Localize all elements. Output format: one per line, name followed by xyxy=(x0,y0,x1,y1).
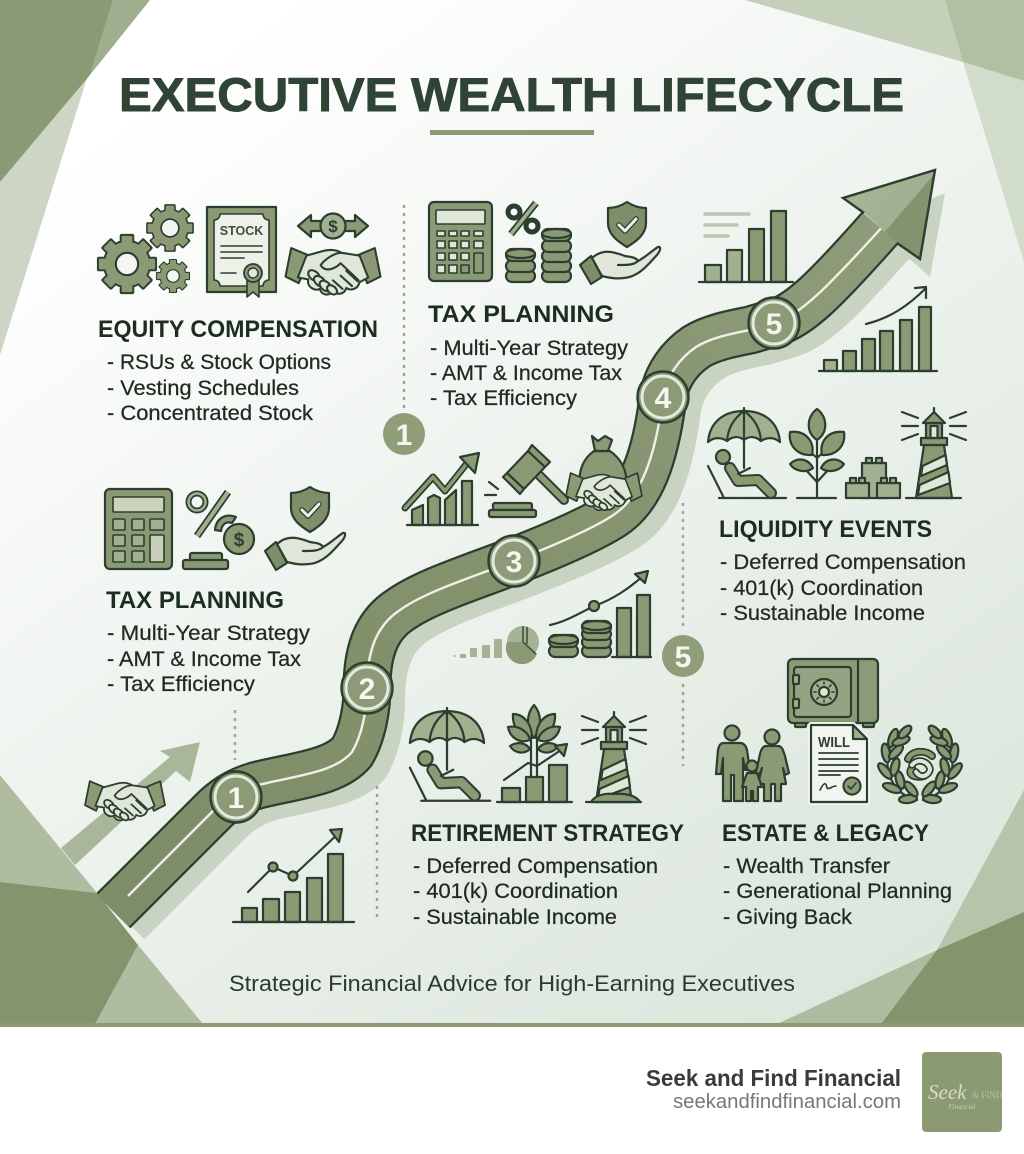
bottom-left corner shapes xyxy=(0,775,203,1024)
heading: RETIREMENT STRATEGY xyxy=(411,820,684,847)
panel: tax planning top xyxy=(428,202,660,410)
icon: plant xyxy=(790,409,844,498)
road badge 4 xyxy=(638,372,688,422)
list: - AMT & Income Tax xyxy=(107,648,302,671)
road body xyxy=(113,228,880,911)
icon: stock certificate: STOCK xyxy=(220,224,263,238)
panel: retirement strategy xyxy=(410,705,684,929)
road badge 4: 4 xyxy=(655,382,672,415)
list xyxy=(430,337,629,410)
list: - Concentrated Stock xyxy=(107,402,314,425)
heading: ESTATE & LEGACY xyxy=(722,820,929,847)
icon: will document xyxy=(811,725,867,802)
icon: bar chart top xyxy=(699,211,793,282)
heading: TAX PLANNING xyxy=(428,301,614,328)
footer logo xyxy=(922,1052,1003,1132)
growth road arrow xyxy=(113,170,945,923)
road badge 3: 3 xyxy=(506,546,522,579)
icon: calculator xyxy=(105,489,172,569)
icon: shield in hand xyxy=(265,487,345,570)
list: - Deferred Compensation xyxy=(413,855,658,878)
icon: safe xyxy=(788,659,878,727)
footer logo: Seek xyxy=(928,1080,967,1104)
icon: growth bar chart lower left xyxy=(233,829,354,922)
list xyxy=(413,855,658,929)
list: - RSUs & Stock Options xyxy=(107,351,331,374)
list: - Multi-Year Strategy xyxy=(430,337,629,360)
icon: will document: WILL xyxy=(818,735,850,751)
plain badge 1 xyxy=(383,413,425,455)
plain badge 1: 1 xyxy=(396,419,412,452)
icon: percent coin and gavel block xyxy=(183,492,254,569)
icon: stock certificate xyxy=(207,207,276,297)
icon: calculator xyxy=(429,202,492,281)
icon: percent coin and gavel block: $ xyxy=(234,530,245,551)
road badge 5 xyxy=(748,298,800,348)
list: - Multi-Year Strategy xyxy=(107,622,311,645)
road badge 2: 2 xyxy=(359,673,375,706)
footer url: seekandfindfinancial.com xyxy=(673,1091,901,1113)
road fill xyxy=(113,228,880,911)
bottom strip xyxy=(0,1023,1024,1027)
heading: LIQUIDITY EVENTS xyxy=(719,516,932,543)
list: - Deferred Compensation xyxy=(720,551,966,574)
icon: shield in hand xyxy=(580,202,660,284)
road badge 2 xyxy=(342,662,392,714)
road shadow xyxy=(128,193,945,923)
icon: mini bars and pie xyxy=(453,626,539,664)
title underline xyxy=(430,130,594,135)
list: - 401(k) Coordination xyxy=(413,880,618,903)
road badge 1: 1 xyxy=(228,782,244,815)
title: EXECUTIVE WEALTH LIFECYCLE xyxy=(119,68,904,121)
icon: percent and coins xyxy=(506,203,571,282)
list: - Tax Efficiency xyxy=(430,387,578,410)
footer logo: Financial xyxy=(947,1103,976,1111)
icon: money bag with handshake xyxy=(566,436,642,512)
list: - Sustainable Income xyxy=(720,602,925,625)
list: - Sustainable Income xyxy=(413,906,617,929)
icon: lighthouse xyxy=(902,408,966,498)
footer logo: & FIND xyxy=(972,1090,1003,1100)
arrow head outline xyxy=(843,170,935,259)
footer brand name: Seek and Find Financial xyxy=(646,1065,901,1091)
bottom-right corner shapes xyxy=(777,790,1024,1024)
icon: umbrella lounger xyxy=(708,408,786,498)
list xyxy=(107,622,311,696)
icon: coins and bars with trend xyxy=(549,571,651,657)
panel: liquidity events xyxy=(708,408,966,625)
icon: gears xyxy=(97,204,194,294)
dotted connector lines xyxy=(235,205,683,922)
heading: TAX PLANNING xyxy=(106,587,284,614)
arrow head xyxy=(843,170,935,259)
list: - Generational Planning xyxy=(723,880,952,903)
list xyxy=(720,551,966,625)
list: - Giving Back xyxy=(723,906,853,929)
list xyxy=(723,855,952,929)
top-right corner shapes xyxy=(745,0,1024,262)
panel: equity compensation xyxy=(97,204,381,425)
small arrow behind handshake xyxy=(61,742,200,865)
road badge 5: 5 xyxy=(766,308,782,341)
road center line xyxy=(128,225,884,896)
list xyxy=(107,351,331,425)
list: - Vesting Schedules xyxy=(107,377,299,400)
icon: handshake with dollar arrows xyxy=(286,214,380,296)
icon: rising bars with curved arrow xyxy=(819,287,937,371)
icon: handshake with dollar arrows: $ xyxy=(328,217,338,236)
icon: blocks xyxy=(846,458,900,498)
plain badge 5 xyxy=(662,635,704,677)
icon: family xyxy=(716,726,789,801)
icon: growth chart with zigzag arrow xyxy=(405,453,479,525)
list: - Wealth Transfer xyxy=(723,855,890,878)
icon: lighthouse on hill xyxy=(582,712,646,802)
top-left corner shapes xyxy=(0,0,150,355)
heading: EQUITY COMPENSATION xyxy=(98,316,378,343)
road badge 3 xyxy=(488,536,540,586)
panel: estate and legacy xyxy=(716,659,964,929)
icon: handshake on small arrow xyxy=(85,781,165,822)
list: - AMT & Income Tax xyxy=(430,362,623,385)
icon: umbrella lounger xyxy=(410,708,490,801)
list: - 401(k) Coordination xyxy=(720,577,923,600)
icon: tree with rising bars xyxy=(497,705,572,802)
panel: tax planning left xyxy=(105,487,345,696)
plain badge 5: 5 xyxy=(675,641,691,674)
road badge 1 xyxy=(210,772,262,822)
list: - Tax Efficiency xyxy=(107,673,256,696)
tagline: Strategic Financial Advice for High-Earning Executives xyxy=(229,971,795,996)
icon: laurel wreath with chain xyxy=(876,724,964,804)
icon: gavel xyxy=(485,445,564,517)
